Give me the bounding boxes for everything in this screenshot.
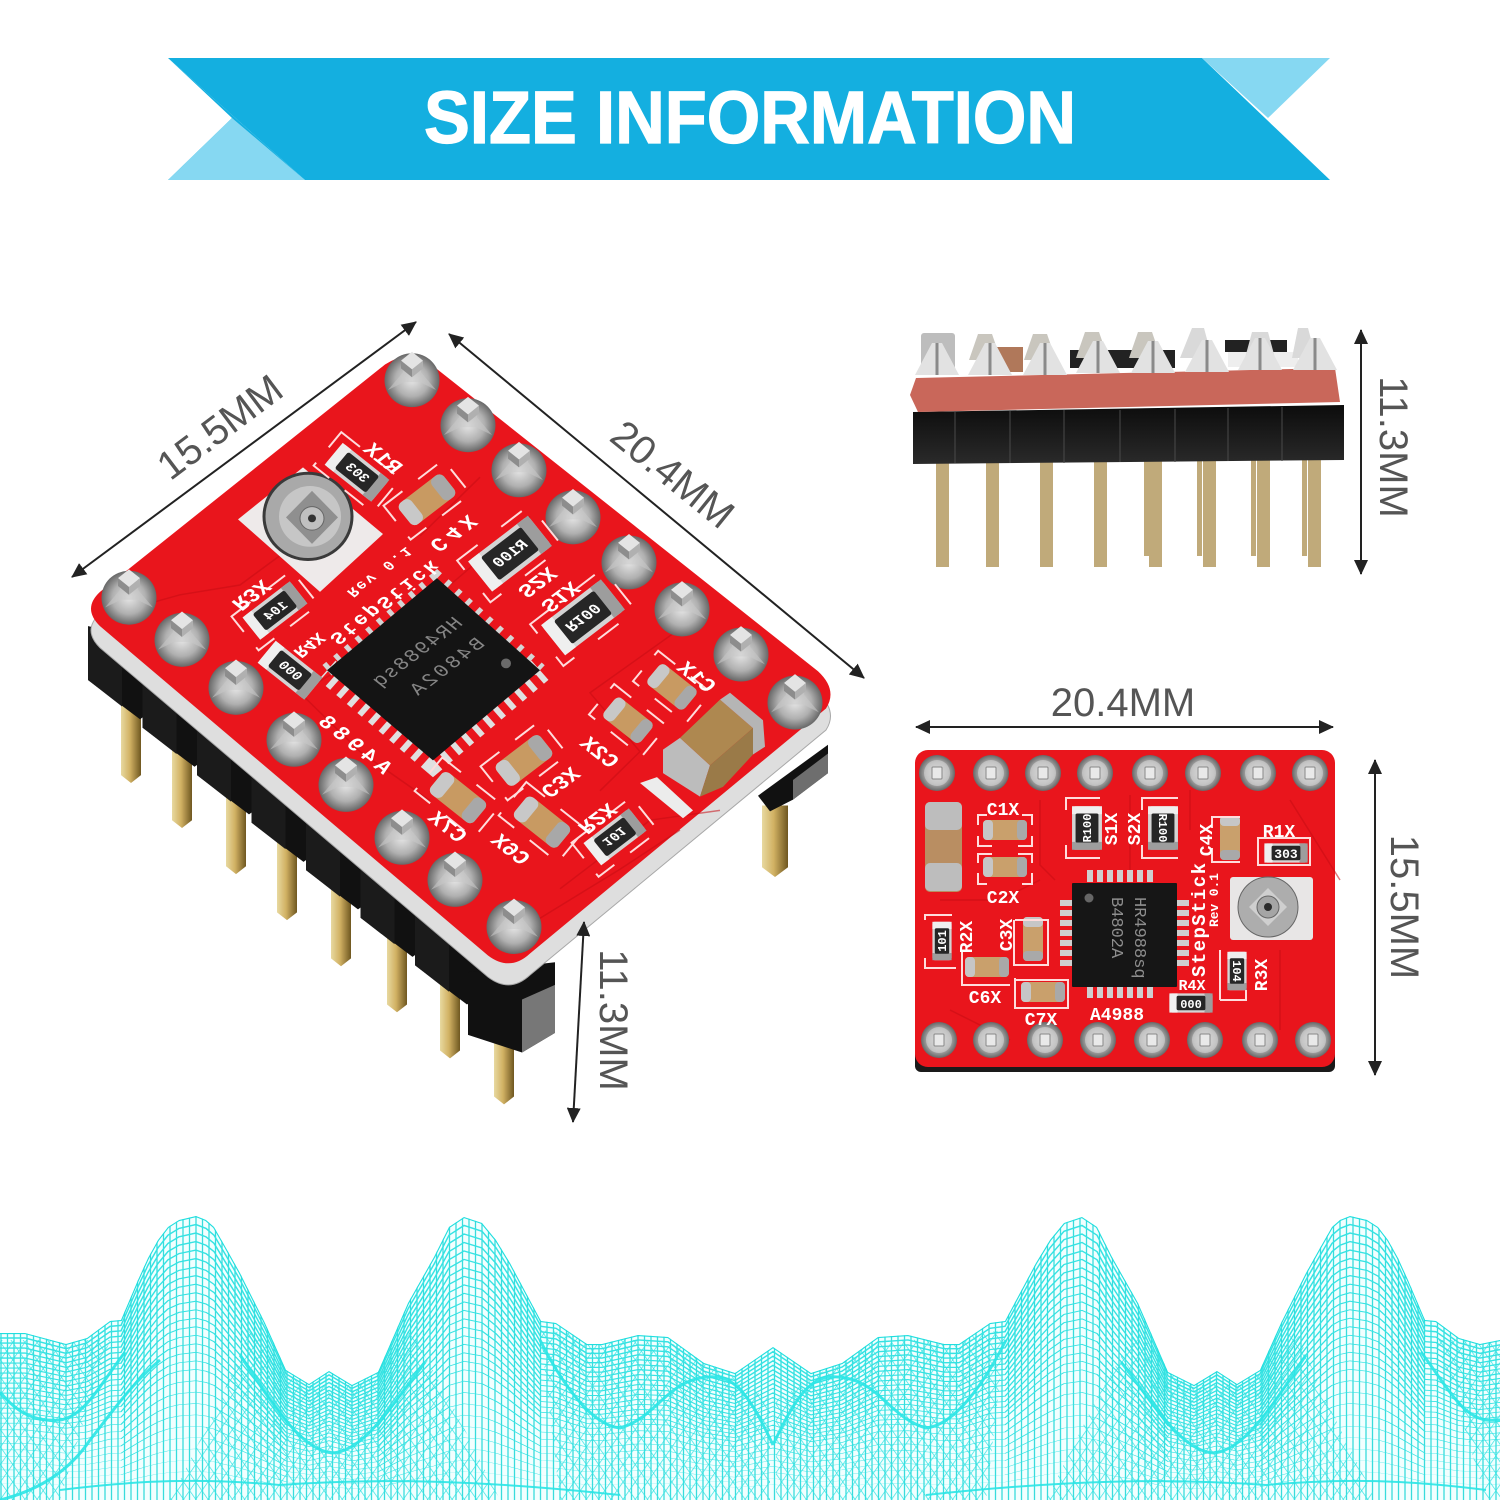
top view: silkscreen labels and outlines: C2X: [987, 889, 1019, 909]
iso: silkscreen labels: C6X: [483, 830, 535, 870]
iso: silkscreen labels: C7X: [420, 807, 472, 847]
top view: resistors and capacitors: R100: [1155, 814, 1169, 842]
top view: large capacitor: [925, 802, 962, 892]
iso: edge pads: [102, 352, 822, 954]
iso: silkscreen labels: S1X: [534, 576, 585, 616]
iso: silkscreen labels: S2X: [511, 561, 562, 601]
dimension: 15.5MM arrow: [72, 322, 416, 577]
title banner: [168, 58, 1330, 180]
top view: silkscreen labels and outlines: R3X: [1253, 959, 1273, 991]
iso: silkscreen labels: [225, 439, 721, 870]
iso: silkscreen labels: C2X: [572, 733, 624, 773]
iso: silkscreen labels: R3X: [225, 574, 276, 614]
dimension: 15.5MM arrow: 15.5MM: [149, 367, 291, 489]
top view: main chip: B4802A: [1106, 897, 1125, 959]
iso: trimmer potentiometer: [238, 467, 383, 592]
top view: silkscreen labels and outlines: R1X: [1263, 823, 1295, 843]
iso: silkscreen labels: R4X: [287, 628, 329, 660]
top view: silkscreen labels and outlines: C3X: [998, 919, 1018, 951]
top view: silkscreen labels and outlines: StepStick: [1189, 863, 1211, 977]
iso: silkscreen labels: R2X: [571, 798, 622, 837]
top view: trimmer potentiometer: [1230, 877, 1313, 940]
top view: main chip: HR4988sq: [1129, 897, 1148, 979]
iso: silkscreen labels: C4X: [423, 509, 483, 555]
top view: silkscreen labels and outlines: R4X: [1178, 978, 1206, 995]
dimension: 11.3MM iso height arrow: 11.3MM: [591, 949, 635, 1091]
dimension: 20.4MM top view arrow: 20.4MM: [1051, 681, 1195, 725]
iso: resistors and capacitors: 101: [597, 823, 630, 848]
top view of module: [915, 750, 1340, 1072]
iso: resistors and capacitors: [232, 432, 765, 877]
top view: edge pads: [919, 755, 1331, 1058]
iso: main chip: B4802A: [405, 634, 491, 700]
top view: resistors and capacitors: 104: [1229, 960, 1243, 982]
iso: silkscreen labels: StepStick: [324, 556, 445, 648]
top view: silkscreen labels and outlines: A4988: [1090, 1006, 1144, 1026]
top view: silkscreen labels and outlines: S2X: [1126, 813, 1146, 845]
iso: resistors and capacitors: 104: [260, 599, 293, 624]
iso: silkscreen labels: Rev 0.1: [342, 543, 415, 599]
iso: resistors and capacitors: R100: [489, 537, 533, 571]
top view: silkscreen labels and outlines: C4X: [1198, 824, 1218, 856]
iso: main chip: HR4988sq: [367, 613, 469, 691]
iso: main chip: [327, 578, 540, 760]
dimension: 20.4MM arrow: [449, 334, 864, 678]
top view: silkscreen labels and outlines: [925, 798, 1310, 1031]
iso: resistors and capacitors: 000: [273, 659, 306, 684]
top view: silkscreen labels and outlines: C6X: [969, 989, 1001, 1009]
dimension: 11.3MM iso height arrow: [573, 922, 635, 1122]
dimension: 20.4MM arrow: 20.4MM: [602, 412, 742, 537]
top view: resistors and capacitors: 000: [1180, 998, 1202, 1012]
top view: main chip: [1066, 876, 1183, 992]
iso: resistors and capacitors: R100: [560, 600, 604, 634]
top view: silkscreen labels and outlines: Rev 0.1: [1207, 873, 1222, 927]
isometric view: circuit board: [91, 352, 830, 985]
dimension: 11.3MM side height arrow: 11.3MM: [1371, 376, 1415, 518]
iso: silkscreen labels: R1X: [356, 439, 407, 479]
top view: resistors and capacitors: [932, 806, 1308, 1013]
iso: silkscreen labels: C1X: [669, 657, 721, 697]
top view: resistors and capacitors: 303: [1274, 847, 1298, 862]
top view: resistors and capacitors: R100: [1081, 814, 1095, 842]
top view: silkscreen labels and outlines: S1X: [1103, 813, 1123, 845]
top view: silkscreen labels and outlines: R2X: [958, 921, 978, 953]
dimension: 15.5MM top view arrow: 15.5MM: [1382, 835, 1426, 979]
iso: silkscreen labels: A4988: [311, 712, 397, 779]
side view of module: [910, 328, 1344, 567]
title banner: SIZE INFORMATION: [424, 76, 1076, 159]
top view: silkscreen labels and outlines: C1X: [987, 801, 1019, 821]
isometric view: pin headers: [88, 626, 828, 1104]
top view: silkscreen labels and outlines: C7X: [1025, 1011, 1057, 1031]
top view: resistors and capacitors: 101: [936, 930, 950, 952]
wireframe mesh landscape: [0, 1200, 1500, 1500]
iso: resistors and capacitors: 303: [340, 461, 373, 486]
iso: silkscreen labels: C3X: [534, 761, 585, 801]
